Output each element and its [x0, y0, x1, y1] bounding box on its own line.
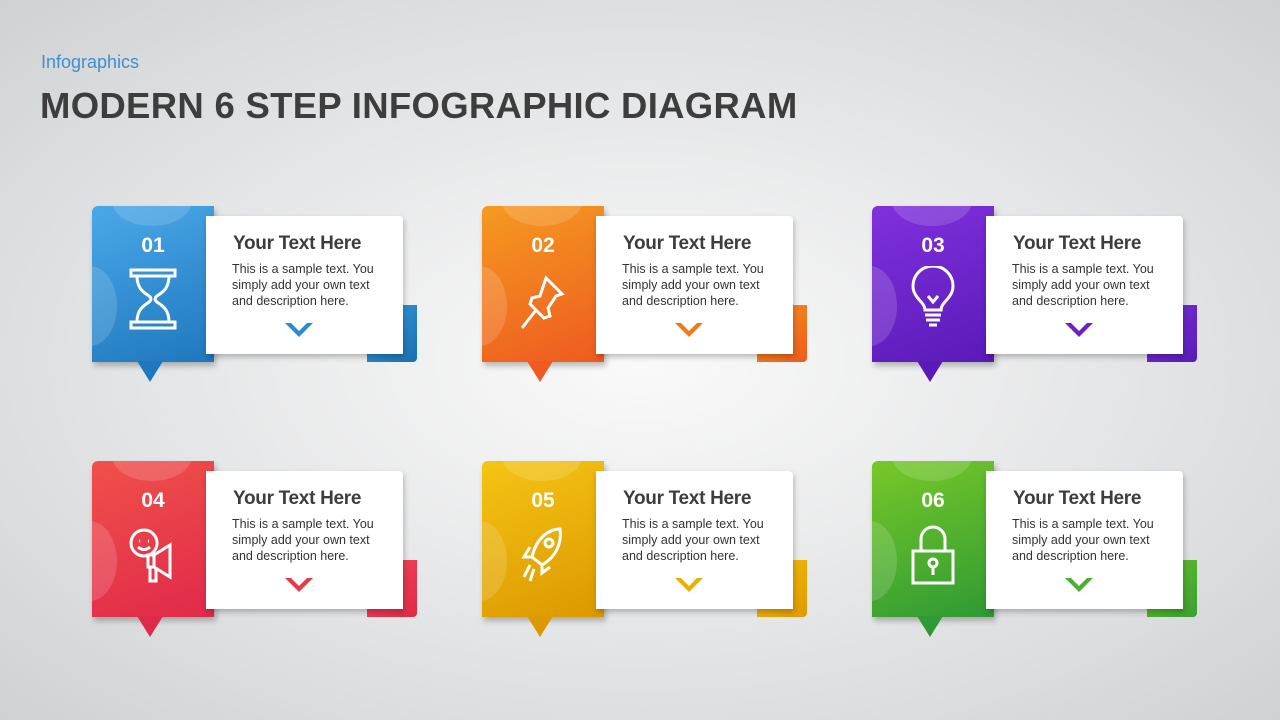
title: MODERN 6 STEP INFOGRAPHIC DIAGRAM — [40, 85, 798, 126]
card 02: This is a sample text. You simply add your own text and description here. — [622, 262, 764, 308]
icon: light bulb — [912, 266, 954, 326]
icon: padlock — [912, 526, 954, 584]
icon: push pin — [520, 275, 565, 329]
chevron — [285, 578, 313, 592]
card 06: 06 — [921, 489, 945, 512]
subtitle: Infographics — [41, 52, 139, 72]
icon: hourglass — [130, 268, 176, 330]
card 01: Your Text Here — [233, 233, 361, 254]
card 04: This is a sample text. You simply add your own text and description here. — [232, 517, 374, 563]
chevron — [285, 323, 313, 337]
card 03: Your Text Here — [1013, 233, 1141, 254]
card 03: This is a sample text. You simply add your own text and description here. — [1012, 262, 1154, 308]
chevron — [1065, 323, 1093, 337]
chevron — [675, 323, 703, 337]
card 04: Your Text Here — [233, 488, 361, 509]
card 05: This is a sample text. You simply add your own text and description here. — [622, 517, 764, 563]
chevron — [1065, 578, 1093, 592]
card 06: Your Text Here — [1013, 488, 1141, 509]
card 01 — [91, 206, 417, 382]
card 06: This is a sample text. You simply add your own text and description here. — [1012, 517, 1154, 563]
card 01: 01 — [141, 234, 165, 257]
card 02: Your Text Here — [623, 233, 751, 254]
card 03 — [871, 206, 1197, 382]
icon: rocket — [521, 528, 562, 582]
card 05: 05 — [531, 489, 555, 512]
chevron — [675, 578, 703, 592]
card 04: 04 — [141, 489, 165, 512]
card 04 — [91, 461, 417, 637]
card 03: 03 — [921, 234, 945, 257]
icon: megaphone — [130, 528, 172, 582]
card 01: This is a sample text. You simply add your own text and description here. — [232, 262, 374, 308]
card 02 — [481, 206, 807, 382]
card 02: 02 — [531, 234, 555, 257]
card 05 — [481, 461, 807, 637]
card 06 — [871, 461, 1197, 637]
card 05: Your Text Here — [623, 488, 751, 509]
